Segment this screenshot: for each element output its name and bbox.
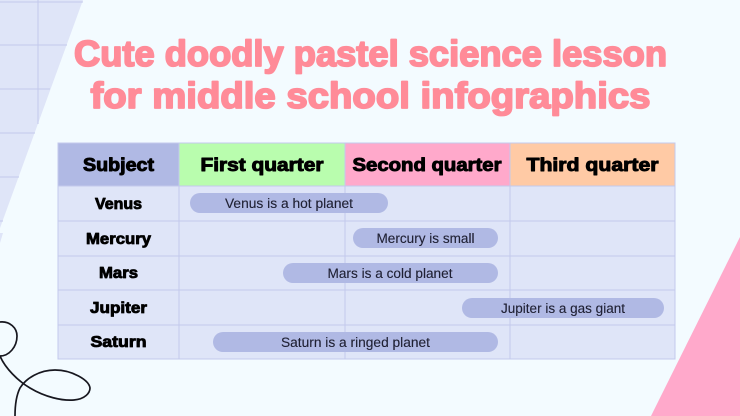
doodle: curly line [0, 322, 90, 416]
decorative grid panel: top left [0, 0, 83, 243]
title: Cute doodly pastel science lesson [74, 33, 667, 74]
bar: Jupiter [462, 298, 664, 318]
table: quarterly schedule [58, 143, 675, 359]
row label: Mercury: Mercury [86, 231, 151, 248]
bar: Mars: Mars is a cold planet [328, 266, 453, 281]
header cell: Third quarter [510, 143, 675, 186]
bar: Venus: Venus is a hot planet [225, 196, 353, 211]
header cell: Third quarter: Third quarter [526, 155, 658, 175]
table body background [58, 186, 675, 359]
decorative triangle: pink corner [651, 237, 740, 416]
header cell: First quarter [179, 143, 345, 186]
bar: Mercury: Mercury is small [376, 231, 474, 246]
header cell: Second quarter: Second quarter [352, 155, 502, 175]
row label: Saturn: Saturn [90, 334, 146, 351]
title [74, 33, 667, 116]
bar: Venus [190, 193, 388, 213]
bar: Jupiter: Jupiter is a gas giant [501, 301, 625, 316]
bar: Mercury [353, 228, 498, 248]
header cell: Subject: Subject [83, 155, 154, 175]
row label: Mars: Mars [99, 265, 138, 282]
row label: Venus: Venus [95, 196, 142, 213]
row label: Jupiter: Jupiter [90, 300, 147, 317]
title: for middle school infographics [90, 75, 650, 116]
bar: Mars [283, 263, 498, 283]
header cell: Subject [58, 143, 179, 186]
bar: Saturn [213, 332, 498, 352]
header cell: Second quarter [345, 143, 510, 186]
header cell: First quarter: First quarter [200, 155, 324, 175]
bar: Saturn: Saturn is a ringed planet [281, 335, 430, 350]
